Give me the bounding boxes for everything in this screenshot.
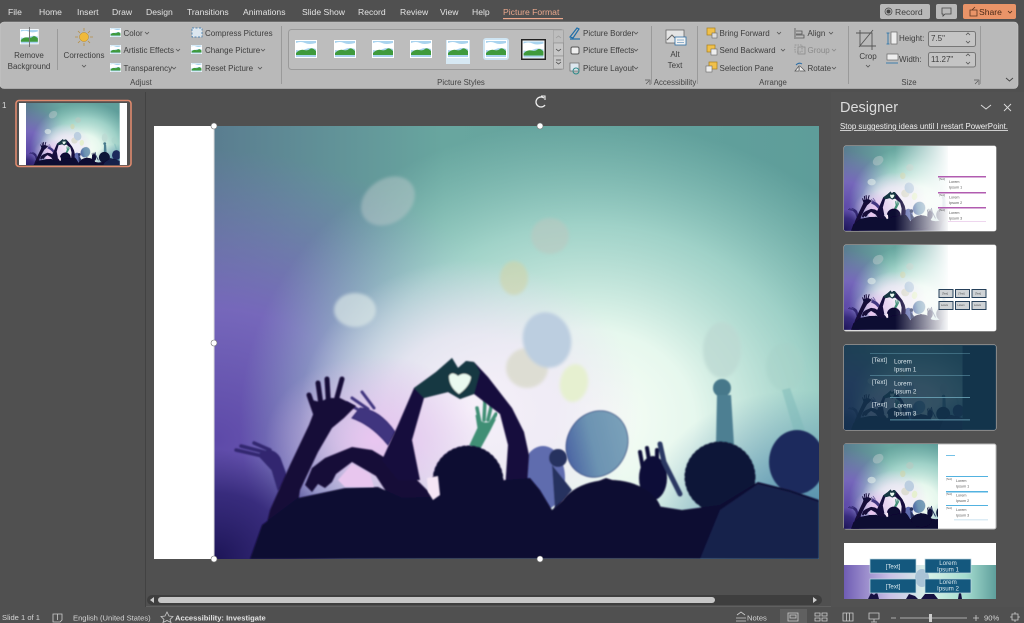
design card 2: Lorem [941, 304, 948, 307]
ribbon tabs: Slide Show [302, 7, 346, 17]
design card 3: Lorem [894, 402, 912, 410]
group: adjust: Change Picture [205, 46, 261, 55]
back hands [236, 392, 395, 490]
ribbon tabs [8, 7, 563, 19]
photo: concert crowd with heart hands and balloons [214, 126, 825, 559]
group: accessibility: Text [668, 61, 683, 70]
design card 1: [Text] [939, 178, 945, 181]
group: accessibility: Alt [670, 50, 680, 59]
designer panel heading [840, 100, 1011, 131]
ribbon tabs: Review [400, 7, 429, 17]
icon: alt text [666, 30, 686, 45]
design card 2: [Text] [942, 292, 948, 296]
icon: corrections sun [75, 28, 93, 46]
curly hair right [687, 444, 753, 510]
design card 1: [Text] [939, 209, 945, 212]
group: arrange: Selection Pane [720, 64, 774, 73]
ribbon tabs: Record [358, 7, 386, 17]
status bar [0, 607, 1024, 623]
group: adjust: Remove [14, 51, 44, 60]
group: size: 11.27" [931, 55, 953, 64]
group: arrange: Group [808, 46, 830, 55]
design card 3: [Text] [872, 402, 887, 408]
design card 4: [Text] [946, 478, 952, 481]
design card 1: Lorem [949, 211, 959, 215]
design card 5 [844, 543, 996, 599]
status bar: Accessibility: Investigate [175, 614, 266, 622]
arm: raised hand far right and person [521, 379, 805, 510]
group: size: Height: [899, 34, 924, 43]
group: size: Size [901, 78, 917, 87]
rotate handle [536, 96, 545, 107]
picture styles gallery: Picture Styles [437, 78, 485, 87]
ribbon panel [0, 22, 1018, 88]
design card 4: [Text] [946, 493, 952, 496]
crowd mass [250, 478, 819, 559]
design card 3: Ipsum 3 [894, 410, 917, 418]
group: adjust: Background [8, 62, 50, 71]
group: size: Crop [859, 52, 877, 61]
design card 4: Ipsum 1 [956, 484, 969, 488]
design card 1: Ipsum 1 [949, 186, 962, 190]
designer panel heading: Designer [840, 100, 898, 116]
status bar: Notes [747, 614, 767, 622]
designer panel heading: Stop suggesting ideas until I restart PowerPoint. [840, 122, 1008, 131]
status bar: English (United States) [73, 614, 151, 622]
slide thumbnail pane [2, 100, 131, 170]
main silhouettes [250, 358, 825, 559]
slide thumbnail pane: 1 [2, 101, 7, 110]
ribbon tabs: Transitions [187, 7, 229, 17]
slide white background [154, 126, 214, 559]
heart hands and arms [382, 358, 529, 500]
group: adjust: Adjust [130, 78, 153, 87]
group: size: 7.5" [931, 34, 945, 43]
design card 5: Lorem [939, 579, 957, 586]
picture border effects layout: Picture Layout [583, 64, 635, 73]
top right buttons [880, 4, 1016, 19]
design card 3: Lorem [894, 358, 912, 366]
picture border effects layout [570, 28, 638, 74]
group: arrange: Bring Forward [720, 29, 770, 38]
picture border effects layout: Picture Border [583, 29, 634, 38]
top right buttons: Record [895, 7, 923, 17]
design card 4: Lorem [956, 508, 966, 512]
group: size [856, 30, 1013, 87]
ribbon tabs: Home [39, 7, 62, 17]
design card 5: Lorem [939, 560, 957, 567]
group: adjust: Transparency [124, 64, 172, 73]
design card 1: Ipsum 3 [949, 216, 962, 220]
design card 3 [844, 345, 996, 430]
design card 4: Lorem [956, 494, 966, 498]
design card 5: [Text] [886, 564, 901, 570]
pane divider lines [146, 92, 1024, 607]
design card 3: Ipsum 2 [894, 388, 917, 396]
design card 4: Lorem [956, 479, 966, 483]
design card 1 [844, 146, 996, 231]
light patch under the arch [338, 464, 374, 487]
group: adjust: Artistic Effects [124, 46, 174, 55]
green hand [470, 401, 496, 452]
design card 4 [844, 444, 996, 529]
group: accessibility: Accessibility [654, 78, 696, 87]
design card 1: Lorem [949, 196, 959, 200]
group: arrange: Send Backward [720, 46, 776, 55]
ribbon tabs: View [440, 7, 459, 17]
group: size: Width: [899, 55, 922, 64]
icon: crop [856, 30, 876, 50]
central curly hair [435, 448, 501, 514]
balloons: upper [334, 166, 804, 404]
left raised hand [258, 379, 356, 559]
person with glasses far right [769, 430, 825, 494]
icon: remove background [20, 27, 39, 47]
group: arrange: Align [808, 29, 825, 38]
design card 1: Lorem [949, 180, 959, 184]
design card 2: Lorem [958, 304, 965, 307]
ribbon tabs: Design [146, 7, 173, 17]
slide thumbnail [16, 100, 131, 170]
top right buttons: Share [979, 7, 1002, 17]
ribbon tabs: Draw [112, 7, 133, 17]
design card 3: [Text] [872, 379, 887, 386]
ribbon tabs: Picture Format [503, 7, 560, 17]
design card 5: Ipsum 1 [937, 566, 960, 574]
group: arrange [706, 28, 836, 87]
group: arrange: Rotate [808, 64, 832, 73]
design card 1: Ipsum 2 [949, 201, 962, 205]
design card 2: [Text] [958, 292, 965, 296]
design card 1: [Text] [939, 194, 945, 197]
design card 5: [Text] [886, 584, 901, 590]
status bar: 90% [984, 614, 999, 622]
design card 4: Ipsum 3 [956, 514, 969, 518]
group: accessibility [654, 30, 696, 87]
design card 3: [Text] [872, 357, 887, 364]
design card 2: [Text] [975, 292, 981, 296]
ribbon tabs: Animations [243, 7, 286, 17]
group: arrange: Arrange [759, 78, 787, 87]
design card 4: Ipsum 2 [956, 499, 969, 503]
selection handles [211, 123, 543, 562]
big blue balloon [555, 400, 639, 488]
design card 2 [844, 245, 996, 331]
hands near the right [639, 444, 680, 500]
group: adjust: Reset Picture [205, 64, 254, 73]
design card 4: [Text] [946, 507, 952, 510]
design card 2: Lorem [974, 304, 981, 307]
horizontal scrollbar [147, 595, 822, 605]
group: adjust: Color [124, 29, 143, 38]
design card 3: Lorem [894, 380, 912, 388]
picture styles gallery [288, 30, 650, 87]
ribbon tabs: Insert [77, 7, 99, 17]
front arch arm [305, 447, 432, 510]
group: adjust: Compress Pictures [205, 29, 273, 38]
status bar: Slide 1 of 1 [2, 613, 40, 622]
design card 3: Ipsum 1 [894, 366, 917, 374]
ribbon tabs: Help [472, 7, 490, 17]
ribbon tabs: File [8, 7, 22, 17]
design card 5: Ipsum 2 [937, 586, 960, 592]
group: adjust: Corrections [64, 51, 104, 60]
group: adjust [8, 27, 273, 87]
picture border effects layout: Picture Effects [583, 46, 634, 55]
